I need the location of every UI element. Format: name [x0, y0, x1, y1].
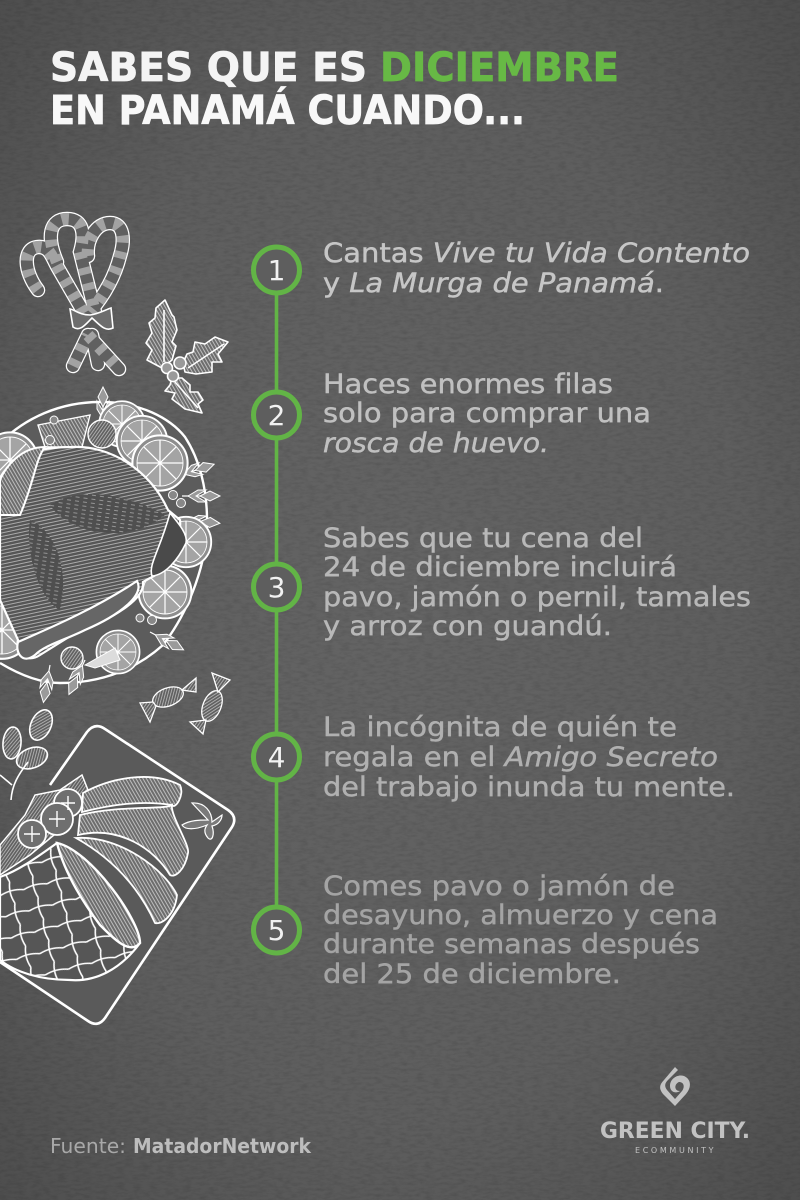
step 3 text [323, 523, 751, 642]
logo tagline: ECOMMUNITY [635, 1146, 715, 1155]
illustration: turkey platter [0, 387, 220, 703]
step 5 text: Comes pavo o jamón de [323, 871, 675, 902]
ham slices [82, 777, 181, 812]
logo wordmark: GREEN CITY. [600, 1119, 750, 1144]
title [50, 45, 619, 134]
step 5 text: desayuno, almuerzo y cena [323, 900, 718, 931]
step 1 text [323, 238, 750, 299]
step 5 marker [254, 907, 300, 953]
step 2 marker [254, 392, 300, 438]
step 1 text: Cantas Vive tu Vida Contento [323, 238, 750, 269]
step 3 text: pavo, jamón o pernil, tamales [323, 582, 751, 613]
step 4 marker: 4 [268, 741, 285, 774]
step 4 text: regala en el Amigo Secreto [323, 742, 718, 773]
logo: Green City Ecommunity [600, 1067, 750, 1155]
turkey body [0, 447, 180, 658]
illustration: ham on cutting board [0, 726, 234, 1024]
step 2 text [323, 369, 651, 459]
step 5 marker: 5 [268, 914, 285, 947]
illustration: candies [140, 673, 230, 734]
title: SABES QUE ES [50, 45, 367, 91]
timeline connector [275, 295, 278, 905]
step 5 text: durante semanas después [323, 929, 700, 960]
step 5 text: del 25 de diciembre. [323, 959, 621, 990]
step 3 text: 24 de diciembre incluirá [323, 552, 677, 583]
source credit: Fuente: [50, 1134, 126, 1158]
ham body [0, 840, 145, 985]
step 1 text: y La Murga de Panamá . [323, 268, 664, 299]
illustration: candy canes [27, 219, 123, 369]
illustration: holly [146, 300, 228, 413]
step 4 text: La incógnita de quién te [323, 712, 677, 743]
basil garnish [182, 803, 222, 839]
logo leaf icon [660, 1067, 690, 1106]
turkey right wing [151, 513, 186, 576]
ham cut face [57, 843, 140, 947]
plate rim [0, 402, 207, 683]
step 2 text: Haces enormes filas [323, 369, 613, 400]
turkey breast shading [29, 494, 165, 610]
step 1 marker [254, 247, 300, 293]
step 2 text: rosca de huevo. [323, 428, 549, 459]
step 2 marker: 2 [268, 399, 285, 432]
step 4 text: del trabajo inunda tu mente. [323, 772, 735, 803]
turkey left wing [0, 447, 45, 515]
step 2 text: solo para comprar una [323, 398, 651, 429]
step 5 text [323, 871, 718, 990]
title: EN PANAMÁ CUANDO... [50, 86, 525, 134]
step 1 marker: 1 [268, 254, 285, 287]
garnish [0, 387, 220, 703]
round garnish [18, 789, 82, 848]
turkey drumstick [17, 581, 138, 659]
source credit: MatadorNetwork [133, 1134, 312, 1158]
step 3 text: y arroz con guandú. [323, 611, 612, 642]
step 3 marker: 3 [268, 571, 285, 604]
leaves under berries [0, 775, 88, 875]
source credit [50, 1134, 312, 1158]
step 3 marker [254, 564, 300, 610]
step 4 marker [254, 734, 300, 780]
step 4 text [323, 712, 735, 803]
title: DICIEMBRE [380, 45, 619, 91]
cutting board [0, 726, 234, 1024]
step 3 text: Sabes que tu cena del [323, 523, 643, 554]
illustration: berries branch [0, 706, 57, 800]
